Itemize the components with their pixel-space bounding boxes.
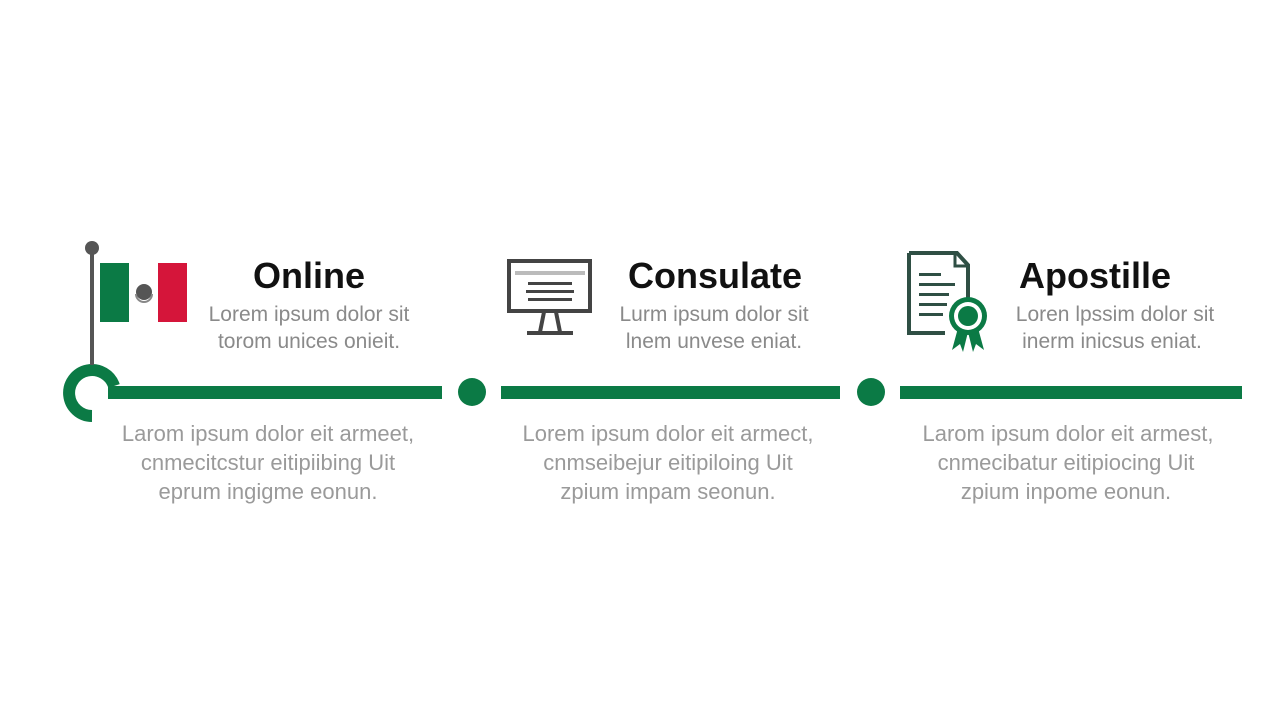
caption 1 [122, 421, 414, 504]
timeline segment 2 [501, 386, 840, 399]
timeline start ring [69, 370, 114, 416]
caption 3: zpium inpome eonun. [961, 479, 1171, 504]
caption 1: eprum ingigme eonun. [159, 479, 377, 504]
icon: monitor [509, 261, 590, 335]
caption 1: Larom ipsum dolor eit armeet, [122, 421, 414, 446]
title: Apostille: Apostille [1019, 255, 1171, 296]
step 1: Online [209, 255, 410, 353]
step 1: Online: torom unices onieit. [218, 330, 400, 353]
subtitle: Loren lpssim dolor sit [1016, 303, 1214, 326]
step 2: Consulate [619, 255, 809, 353]
timeline dot 2 [458, 378, 486, 406]
timeline segment 1 [108, 386, 442, 399]
caption 2: zpium impam seonun. [560, 479, 776, 504]
timeline [69, 370, 1242, 416]
caption 2: cnmseibejur eitipiloing Uit [543, 450, 793, 475]
timeline segment 3 [900, 386, 1242, 399]
step 3: Apostille [1016, 255, 1214, 353]
step 2: Consulate: lnem unvese eniat. [626, 330, 802, 353]
timeline dot 3 [857, 378, 885, 406]
title: Consulate: Consulate [628, 255, 802, 296]
caption 3: Larom ipsum dolor eit armest, [922, 421, 1214, 446]
caption 1: cnmecitcstur eitipiibing Uit [141, 450, 395, 475]
icon: mexico flag [85, 241, 187, 365]
caption 3: cnmecibatur eitipiocing Uit [938, 450, 1194, 475]
title: Online: Online [253, 255, 365, 296]
subtitle: Lorem ipsum dolor sit [209, 303, 410, 326]
caption 2 [522, 421, 814, 504]
icon: apostille document [909, 253, 987, 352]
caption 3 [922, 421, 1214, 504]
caption 2: Lorem ipsum dolor eit armect, [522, 421, 814, 446]
step 3: Apostille: inerm inicsus eniat. [1022, 330, 1202, 353]
subtitle: Lurm ipsum dolor sit [619, 303, 809, 326]
